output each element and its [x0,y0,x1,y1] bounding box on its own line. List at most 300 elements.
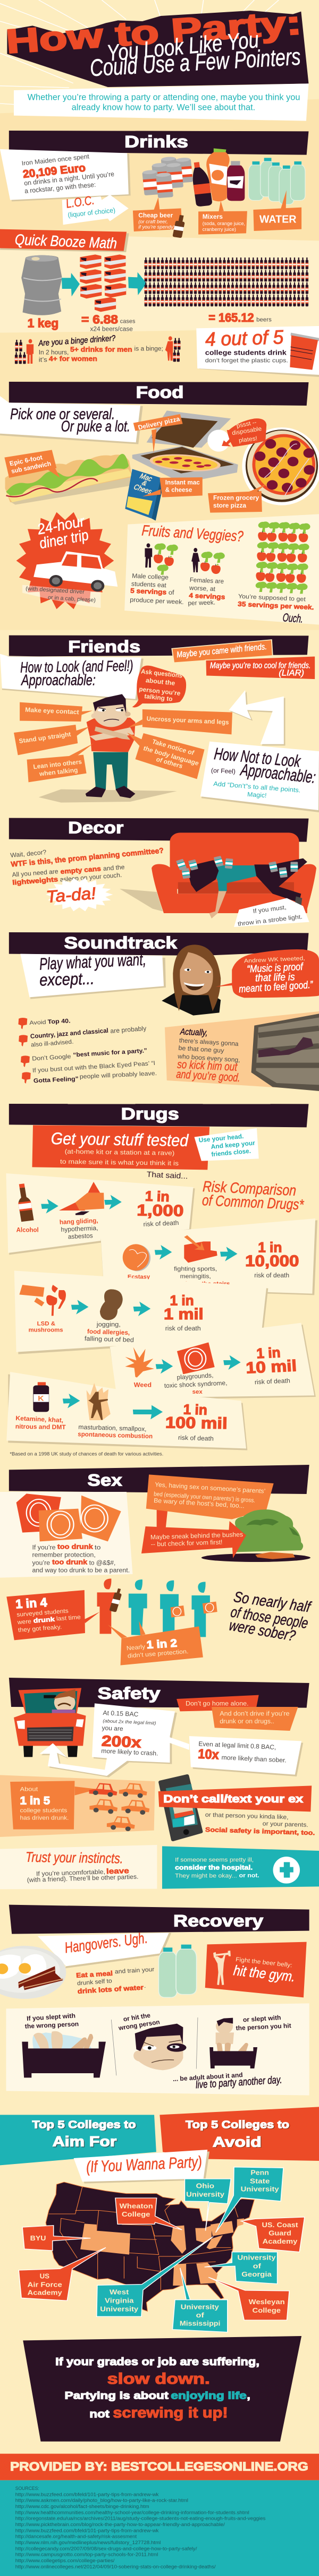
iron maiden note: 20,109 Euro [22,161,86,181]
panel: lsd and mushrooms: food allergies, [87,1328,130,1336]
list: what to avoid: people will probably leave. [79,1070,157,1080]
iron maiden note: on drinks in a night. Until you’re [23,170,115,187]
panel: trust your instincts: Trust your instincts. [26,1849,123,1867]
label: body language: the body language [142,744,200,767]
callout: 200x: At 0.15 BAC [103,1709,139,1718]
panel: lsd and mushrooms: falling out of bed [85,1335,134,1344]
stat: cases [81,313,136,332]
decor text: lightweights [12,875,58,886]
white arrow [229,690,285,745]
hangovers panel: Hangovers. Ugh. [63,1929,149,1956]
text: eat a meal [76,1966,155,1995]
binge note: In 2 hours, [39,348,69,356]
label: sub sandwich [4,450,60,478]
sources panel: http://www.pickthebrain.com/blog/rock-the-party-how-to-appear-friendly-and-approachable/ [15,2522,225,2528]
panel: ecstasy: 10,000 [245,1252,299,1270]
panel: be adult about it: or slept with [242,2014,281,2023]
bottle grid [144,257,309,307]
note: use your head: Use your head. [198,1132,244,1144]
panel: consider the hospital: consider the hospital. [175,1864,253,1871]
banner: avoid: Avoid [213,2134,262,2150]
diner trip starburst: diner trip [38,527,90,552]
soundtrack heading bar: Soundtrack [64,934,177,952]
panel: lsd and mushrooms: 1 in [170,1293,194,1309]
panel: weed: sex [192,1388,203,1395]
label: delivery pizza [133,414,183,453]
panel: ketamine: 100 mil [165,1413,228,1432]
list: what to avoid: also ill-advised. [31,1038,74,1048]
ta-da starburst [45,878,113,911]
sources panel: http://www.collegetips.com/college-parties/ [15,2558,115,2564]
icon: mac and cheese: Chees [132,483,153,496]
section: drinks [0,131,308,238]
closing message panel: slow down. [107,2371,210,2388]
approachable panel [0,654,144,700]
panel: don't call or text [158,1776,315,1840]
label: frozen pizza: store pizza [213,502,247,509]
panel: consider the hospital: If someone seems pretty ill, [175,1856,254,1863]
label: mixers [198,201,247,235]
icon: sandwich [5,454,132,505]
banner: avoid: Avoid [213,2135,262,2151]
callout: air force [19,2247,106,2300]
play what you want panel: Play what you want, [39,950,147,974]
decor text: All you need are [12,868,58,878]
decor text: WTF is this, the prom planning committee? [11,846,164,869]
sources panel: http://www.askmen.com/daily/photo_blog/how-to-party-like-a-rock-star.html [15,2498,188,2503]
how not panel [200,742,319,812]
panel: 1 in 5 driven drunk [0,1775,155,1837]
list: what to avoid: Don’t Google [32,1053,71,1062]
title: How to Party: [5,4,303,61]
note: use your head [194,1128,259,1161]
stat: 1 in 4 [6,1590,99,1640]
panel: ketamine: spontaneous combustion [78,1430,153,1440]
banner: aim for [0,2115,156,2165]
panel: consider the hospital: They might be okay... [175,1872,237,1879]
callout: georgia: Georgia [241,2271,272,2279]
diner trip starburst: or in a cab, please) [48,595,96,604]
callout: coast guard [241,2217,305,2252]
sources panel: http://dancesafe.org/health-and-safety/risk-assesment [15,2534,137,2539]
label: water [253,190,301,231]
callout: 10x: more likely than sober. [221,1754,287,1764]
label: body language [127,733,205,779]
L.O.C. arrow: L.O.C. [65,193,95,211]
label: frozen pizza [208,484,266,513]
binge note [15,334,180,364]
label: stand up straight: Stand up straight [18,730,72,745]
note: don't drive: And don’t drive if you’re [220,1710,290,1717]
note: too cool: (LIAR) [279,669,304,677]
panel: ecstasy: fighting sports, [174,1265,217,1272]
note: came with friends: Maybe you came with friends. [176,641,267,659]
closing message panel: enjoying life [171,2390,247,2401]
panel: hit the gym: hit the gym. [232,1963,296,1985]
sources panel [0,2480,319,2576]
protection panel: remember protection, [32,1551,96,1558]
header [5,4,308,121]
label: cheap beer: if you’re spendy) [138,225,175,230]
callout: 10x: 10x [198,1746,220,1762]
character: arms crossed [39,694,177,803]
sources panel: http://www.onlinecolleges.net/2012/04/09/10-sobering-stats-on-college-drinking-deaths/ [15,2564,216,2570]
section: friends [0,636,319,812]
decor text: Wait, decor? [10,848,47,859]
callout: penn state: State [250,2177,270,2185]
recovery heading bar [9,1905,309,1934]
speech bubble [132,666,186,707]
fruits and veggies panel: per week. [188,598,215,607]
fruits and veggies panel: You’re supposed to get [238,593,306,603]
list: what to avoid: are probably [110,1025,147,1035]
panel: ketamine: nitrous and DMT [15,1423,66,1431]
callout: ohio: University [186,2191,224,2199]
pick one panel: Pick one or several. [10,406,115,423]
panel: alcohol: risk of death [143,1219,179,1228]
section: food [0,382,319,625]
callout: mississippi: University [181,2303,219,2311]
sign: parents bed: Be wary of the host’s bed, too... [154,1497,245,1509]
binge note: Are you a binge drinker? [38,334,116,348]
panel: alcohol: hypothermia, [61,1224,98,1233]
label: uncross arms: Uncross your arms and legs [146,715,229,726]
note: don't drive: drunk or on drugs.. [220,1718,274,1725]
closing message panel: , [247,2390,250,2401]
callout: ohio: Ohio [196,2183,214,2190]
stat: beers: beers [256,317,272,323]
actually panel: there’s always gonna [179,1036,239,1047]
fruits and veggies panel: Females are [189,576,224,585]
binge note: it’s [39,356,47,363]
panel: be adult about it: or hit the [122,2012,151,2023]
speech bubble: andrew wk quote [216,949,319,998]
map of US [46,2182,254,2311]
panel: ecstasy: 1 in [258,1240,282,1256]
stat: 1 in 4: last time [56,1613,81,1622]
callout: georgia: University [238,2254,276,2262]
panel: 1 in 5 driven drunk: has driven drunk. [20,1814,69,1821]
speech bubble: about the [145,676,175,687]
play what you want panel [20,950,166,999]
fruits and veggies panel: Fruits and Veggies? [141,522,244,545]
panel: lsd and mushrooms: risk of death [165,1325,201,1332]
icon: keg [21,255,62,315]
friends heading bar [9,636,308,657]
panel: lsd and mushrooms [14,1270,268,1354]
label: sub sandwich: Epic 6-foot [9,453,44,467]
panel: hit the gym: Fight the beer belly: [235,1956,293,1969]
ta-da starburst: Ta-da! [45,884,97,906]
arrow sign: behind the bushes: Maybe sneak behind the bushes [150,1531,243,1541]
callout: 10x: Even at legal limit 0.8 BAC, [198,1740,276,1751]
fruits and veggies panel: 4 servings [189,592,225,601]
icon: mac and cheese [125,469,164,521]
label: mac and cheese: Instant mac [165,479,200,486]
callout: air force: Air Force [28,2281,62,2289]
note: don't drive [212,1707,298,1731]
drinks heading bar [9,131,308,155]
binge note: 5+ drinks for men [70,346,132,353]
callout: west virginia [97,2237,213,2316]
protection panel: to @&$#, [89,1559,115,1566]
text: eat a meal: drunk self to [77,1977,112,1987]
get your stuff tested: to make sure it is what you think it is [60,1158,179,1167]
panel: be adult about it [6,2003,309,2096]
section: decor [9,818,316,928]
diner trip starburst: 24-hour [35,513,87,538]
protection panel: you’re [32,1559,50,1566]
safety heading bar: Safety [98,1684,161,1703]
label: stand up straight [14,725,89,755]
closing message panel: not [89,2408,110,2420]
panel: weed: risk of death [254,1377,290,1386]
callout: wesleyan [208,2277,289,2320]
panel: trust your instincts [0,1845,157,1889]
icon: truck with driver [14,1688,86,1757]
panel: ketamine: Ketamine, khat, [15,1414,64,1424]
callout: 200x: more likely to crash. [101,1747,158,1757]
panel: ketamine: 1 in [183,1402,207,1418]
closing message panel [23,2336,301,2442]
fruits and veggies panel: Male college [132,572,169,581]
risk comparison heading [202,1178,305,1213]
banner: avoid: Top 5 Colleges to [187,2119,290,2131]
that said: That said... [146,1171,188,1181]
icon: bush and puddle [202,1509,310,1562]
arrow sign: behind the bushes: -- but check for vom first! [150,1538,223,1548]
get your stuff tested [32,1125,209,1170]
sources panel: http://collegecandy.com/2007/09/08/sex-drugs-and-college-how-to-party-safely/ [15,2546,197,2552]
binge note: is a binge; [135,345,163,352]
callout: west virginia: University [100,2305,138,2313]
speech bubble: talking to [144,692,173,702]
panel: consider the hospital [162,1846,319,1889]
how not panel: (or Feel) [211,767,236,775]
get your stuff tested: Get your stuff tested [51,1129,189,1150]
stat: 1 in 4: they got freaky. [18,1624,62,1634]
note: don't go home alone [177,1695,259,1711]
banner: Quick Booze Math [14,231,117,252]
callout: disposable plates: pssst -- [236,419,257,430]
arrow [62,273,80,296]
protection panel: and way too drunk to be a parent. [32,1567,130,1574]
closing message panel: screwing it up! [113,2405,228,2421]
fruits and veggies panel [124,514,319,625]
sources panel: http://www.campusgrotto.com/top-party-schools-for-2011.html [15,2552,158,2557]
list: what to avoid: Country, jazz and classical [30,1027,108,1040]
provided by band [0,2454,319,2480]
callout: penn state [216,2167,283,2232]
callout: 200x: 200x [101,1732,142,1751]
panel: ecstasy: Ecstasy [128,1273,150,1280]
sign: parents bed [146,1474,274,1527]
iron maiden note: a rockstar, go with these: [24,181,96,195]
panel: 1 in 5 driven drunk: college students [20,1807,67,1814]
icon: soda bottle [190,161,213,207]
icon: water bottles [158,1945,197,1997]
decor text: and the [103,863,125,872]
panel: ketamine: masturbation, smallpox, [78,1423,147,1432]
icon: water bottles [249,158,305,204]
callout: coast guard: Academy [263,2238,297,2246]
section: sex [9,1465,309,1494]
list: what to avoid: “best music for a party.” [73,1047,147,1058]
panel: ecstasy: meningitis, [180,1273,211,1280]
panel: don't call or text: Social safety is important, too. [205,1826,315,1836]
label: mixers: Mixers [203,213,223,220]
sources panel: http://oregonstate.edu/ua/ncs/archives/2011/aug/study-college-students-not-eating-enough-fruits-and-veggies [15,2516,266,2521]
4 out of 5 panel: 4 out of 5 [205,327,284,350]
callout: georgia: of [253,2262,261,2270]
handwritten note: sober [228,1588,313,1644]
panel: alcohol: 1,000 [137,1201,184,1220]
closing message panel: If your grades or job are suffering, [55,2355,259,2368]
panel: alcohol: hang gliding, [59,1217,98,1226]
panel: ketamine [6,1372,247,1450]
icon: eggs and bacon [0,1946,66,1999]
panel: ecstasy: risk of death [254,1272,289,1279]
binge note: 4+ for women [49,355,97,363]
approachable panel: Approachable: [21,672,96,689]
protection panel: too drunk [57,1543,93,1550]
speech bubble: person you’re [139,685,181,697]
panel: trust your instincts: (with a friend). There’ll be other parties. [27,1873,139,1884]
label: eye contact [20,702,93,722]
label: eye contact: Make eye contact [25,706,80,716]
L.O.C. arrow [62,193,129,225]
actually panel: be that one guy [178,1044,225,1054]
section: top colleges [0,2107,319,2332]
L.O.C. arrow: (liquor of choice) [68,207,116,219]
play what you want panel: except... [39,969,95,990]
4 out of 5 panel: don’t forget the plastic cups. [205,357,288,364]
banner: aim for: Top 5 Colleges to [33,2119,137,2131]
icon: mac and cheese: Mac [139,472,154,483]
panel: don't call or text: or your parents. [263,1820,308,1828]
panel: weed: 10 mil [245,1356,297,1377]
sex heading bar [9,1465,309,1494]
decor heading bar: Decor [68,818,123,837]
label: lean into others: Lean into others [33,758,82,770]
list: what to avoid: Avoid [29,1019,46,1026]
speech bubble: andrew wk quote: that life is [255,971,295,984]
panel: ketamine: risk of death [178,1434,214,1442]
icon: mac and cheese: & [141,479,148,487]
note: strobe light: throw in a strobe light. [237,913,303,928]
fruits and veggies panel: 5 servings [130,587,167,596]
decor heading bar [9,818,308,842]
protection panel [0,1492,132,1578]
closing message panel: Partying is about [65,2390,169,2401]
sources panel: http://www.healthcommunities.com/healthy-school-year/college-drinking-information-for-students.shtml [15,2510,249,2515]
text: eat a meal: . [144,1982,146,1989]
label: mac and cheese: & cheese [165,486,192,493]
stat: cases: cases [120,319,136,324]
intro box: already know how to party. We’ll see about that. [72,102,255,112]
icon: cases [80,254,126,312]
banner: aim for: Top 5 Colleges to [32,2118,136,2131]
section: quick booze math [0,229,319,377]
decor text [10,846,164,886]
iron maiden note [0,149,131,201]
panel: alcohol: Alcohol [16,1226,39,1233]
panel: 1 in 5 driven drunk: 1 in 5 [20,1794,50,1807]
note: don't go home alone: Don’t go home alone. [186,1700,249,1707]
callout: wesleyan: College [252,2307,281,2315]
section: drugs [6,1104,317,1295]
note: use your head: And keep your [211,1139,255,1150]
icon: frozen pizza [242,427,319,505]
sources panel: SOURCES: [15,2486,39,2492]
callout: mississippi [172,2268,228,2332]
label: water: WATER [259,213,297,225]
stat: 1 in 4: drunk [33,1615,55,1624]
icon: cranberry juice [227,161,245,201]
panel: weed: Weed [134,1381,152,1388]
stat: 1 in 4: 1 in 4 [15,1595,47,1611]
callout: disposable plates [207,418,266,452]
sources panel: http://www.buzzfeed.com/bfeld/101-party-tips-from-andrew-wk [15,2492,159,2497]
callout: wheaton: Wheaton [120,2202,153,2210]
callout: mississippi: of [196,2312,204,2320]
drugs heading bar [9,1104,308,1127]
provided by band: PROVIDED BY: BESTCOLLEGESONLINE.ORG [10,2460,308,2474]
footnote: *Based on a 1998 UK study of chances of death for various activities. [10,1452,163,1457]
callout: ohio [184,2179,231,2231]
panel: trust your instincts: leave [106,1867,129,1876]
panel: consider the hospital: or not. [239,1872,259,1879]
section: safety [0,1688,319,1934]
stat: 1 in 2: didn’t use protection. [127,1648,189,1659]
label: body language: of others [155,755,184,770]
fruits and veggies panel: Ouch. [282,611,304,625]
recovery heading bar: Recovery [173,1911,263,1930]
pizza box [132,410,238,483]
speech bubble: andrew wk quote: Andrew WK tweeted, [244,956,305,964]
food heading bar: Food [136,383,184,402]
approachable panel: How to Look (and Feel!) [20,657,133,676]
callout: coast guard: US. Coast [262,2221,298,2229]
list: what to avoid: If you bust out with the Black Eyed Peas’ “I [32,1060,155,1074]
icon: four people [97,1578,217,1637]
pick one panel [0,396,143,444]
4 out of 5 panel: college students drink [205,349,287,356]
pick one panel: Or puke a lot. [61,418,130,435]
banner: aim for: Aim For [53,2135,117,2151]
sources panel: http://www.nlm.nih.gov/medlineplus/news/fullstory_127728.html [15,2540,161,2546]
actually panel: so kick him out [177,1058,238,1074]
couch scene [120,832,316,918]
sources panel: http://www.cdc.gov/alcohol/fact-sheets/binge-drinking.htm [15,2504,149,2510]
callout: air force: Academy [28,2289,62,2297]
banner: aim for: Aim For [53,2134,116,2150]
callout: wheaton [115,2198,182,2230]
food heading bar [9,382,308,406]
actually panel [165,1011,319,1091]
label: cheap beer: Cheap beer [138,211,173,219]
panel: weed: playgrounds, [177,1371,214,1381]
intro box [14,83,308,121]
stat: 1 in 2 [108,1621,203,1665]
list: what to avoid [18,1017,157,1084]
if you wanna party banner: (If You Wanna Party) [86,2153,203,2176]
note: strobe light: If you must, [253,904,287,915]
label: frozen pizza: Frozen grocery [213,494,259,501]
note: too cool [205,656,315,680]
callout: wesleyan: Wesleyan [249,2298,285,2306]
label: cheap beer [133,198,186,238]
